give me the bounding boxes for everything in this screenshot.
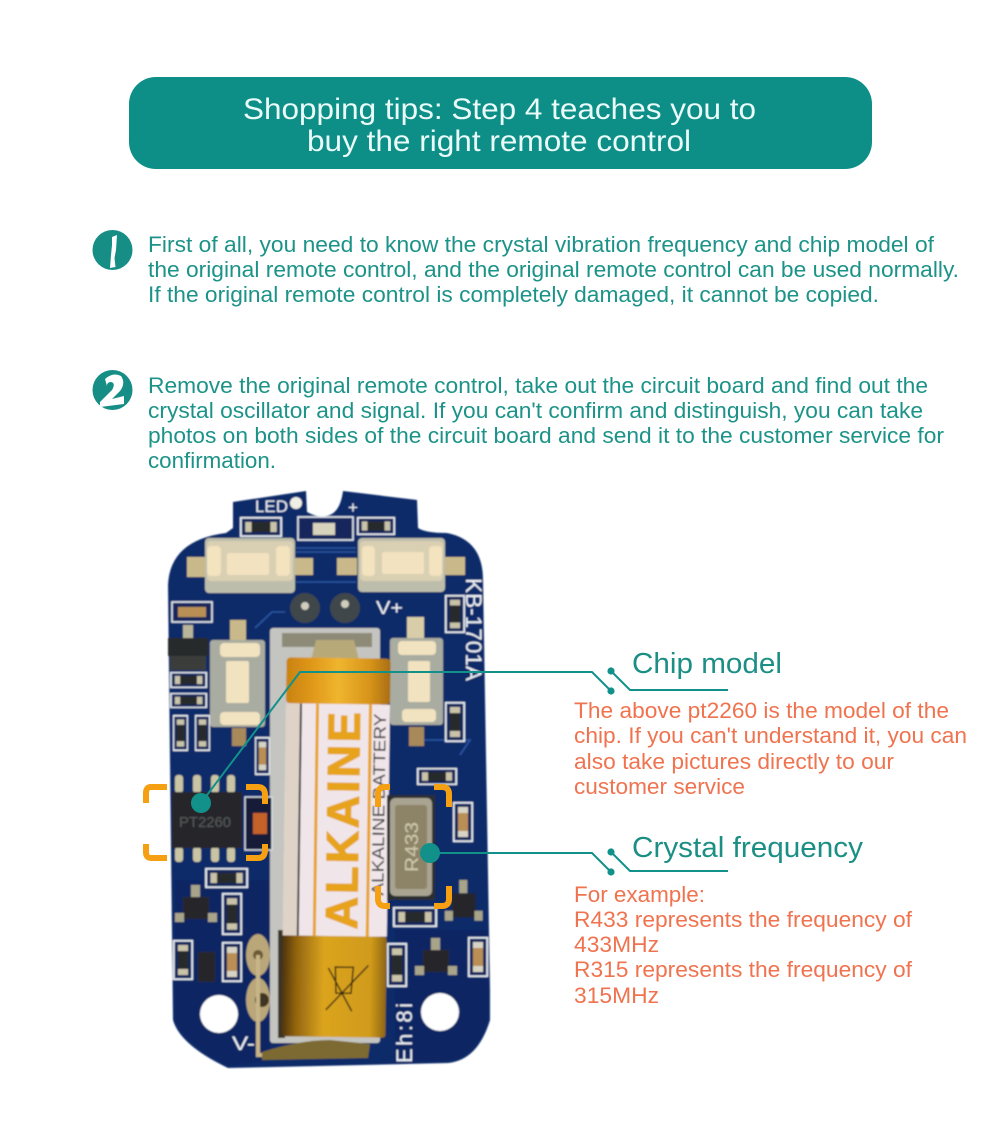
step 1 text: the original remote control, and the original remote control can be used normally. <box>148 257 959 282</box>
wire and solder pads <box>246 934 370 1060</box>
tact switch top right <box>358 538 445 592</box>
icon: crossed-out bin on battery <box>326 965 368 1011</box>
icon: number 1 badge <box>92 230 132 270</box>
battery <box>281 657 391 1038</box>
step 2 text: Remove the original remote control, take out the circuit board and find out the <box>148 373 928 398</box>
battery brand text: ALKAINE <box>316 712 370 929</box>
battery holder <box>270 628 380 1043</box>
small surface-mount parts <box>168 596 487 986</box>
crystal frequency description: For example: <box>574 882 705 907</box>
step 1 text <box>148 232 959 307</box>
title text: Shopping tips: Step 4 teaches you to <box>243 93 756 126</box>
step 2 text: crystal oscillator and signal. If you can't confirm and distinguish, you can take <box>148 398 923 423</box>
crystal frequency description: 433MHz <box>574 932 659 957</box>
board silkscreen labels: V- <box>232 1034 255 1055</box>
orange brackets: crystal <box>378 787 449 906</box>
diode <box>245 797 272 850</box>
step 2 <box>92 370 944 473</box>
crystal R433: R433 <box>402 822 422 872</box>
tact switch right <box>390 617 443 746</box>
callout connector: chip model <box>191 667 728 813</box>
tact switch top left <box>205 538 295 593</box>
step 2 text: confirmation. <box>148 448 276 473</box>
crystal frequency description: 315MHz <box>574 983 659 1008</box>
crystal frequency description: R315 represents the frequency of <box>574 957 913 982</box>
callout connector: crystal frequency <box>420 843 728 876</box>
board silkscreen labels: V+ <box>376 598 403 618</box>
crystal frequency description: R433 represents the frequency of <box>574 907 913 932</box>
battery small text: ALKALINE BATTERY <box>368 713 390 896</box>
mounting holes <box>200 497 459 1033</box>
title text: buy the right remote control <box>307 125 691 158</box>
tact switch left <box>210 620 265 746</box>
board shading <box>175 880 488 1066</box>
step 1 text: If the original remote control is completely damaged, it cannot be copied. <box>148 282 879 307</box>
crystal frequency description <box>574 882 913 1008</box>
chip model heading: Chip model <box>632 648 782 680</box>
board silkscreen labels: KB-1701A <box>461 578 486 681</box>
icon: number 2 badge <box>92 370 132 410</box>
board silkscreen labels <box>232 497 486 1063</box>
crystal R433 <box>387 795 435 900</box>
chip PT2260: PT2260 <box>179 814 231 831</box>
top row components <box>187 517 465 577</box>
step 1 <box>92 230 959 307</box>
step 2 text: photos on both sides of the circuit board and send it to the customer service for <box>148 423 944 448</box>
circuit board photo <box>168 491 490 1068</box>
chip model description: also take pictures directly to our <box>574 749 894 774</box>
chip model description: chip. If you can't understand it, you can <box>574 723 967 748</box>
board silkscreen labels: Eh:8i <box>392 1003 417 1063</box>
chip model description: customer service <box>574 774 745 799</box>
title banner <box>129 77 872 169</box>
step 1 text: First of all, you need to know the crystal vibration frequency and chip model of <box>148 232 935 257</box>
orange brackets: chip <box>146 787 265 858</box>
chip model description <box>574 698 967 799</box>
chip PT2260 <box>172 775 242 862</box>
solder joints <box>290 593 360 623</box>
chip model description: The above pt2260 is the model of the <box>574 698 949 723</box>
board outline <box>168 491 490 1068</box>
crystal frequency heading: Crystal frequency <box>632 832 863 864</box>
title text <box>243 93 756 158</box>
step 2 text <box>148 373 944 473</box>
board silkscreen labels: LED <box>255 497 288 516</box>
board silkscreen labels: + <box>348 498 358 517</box>
board traces <box>255 548 470 755</box>
